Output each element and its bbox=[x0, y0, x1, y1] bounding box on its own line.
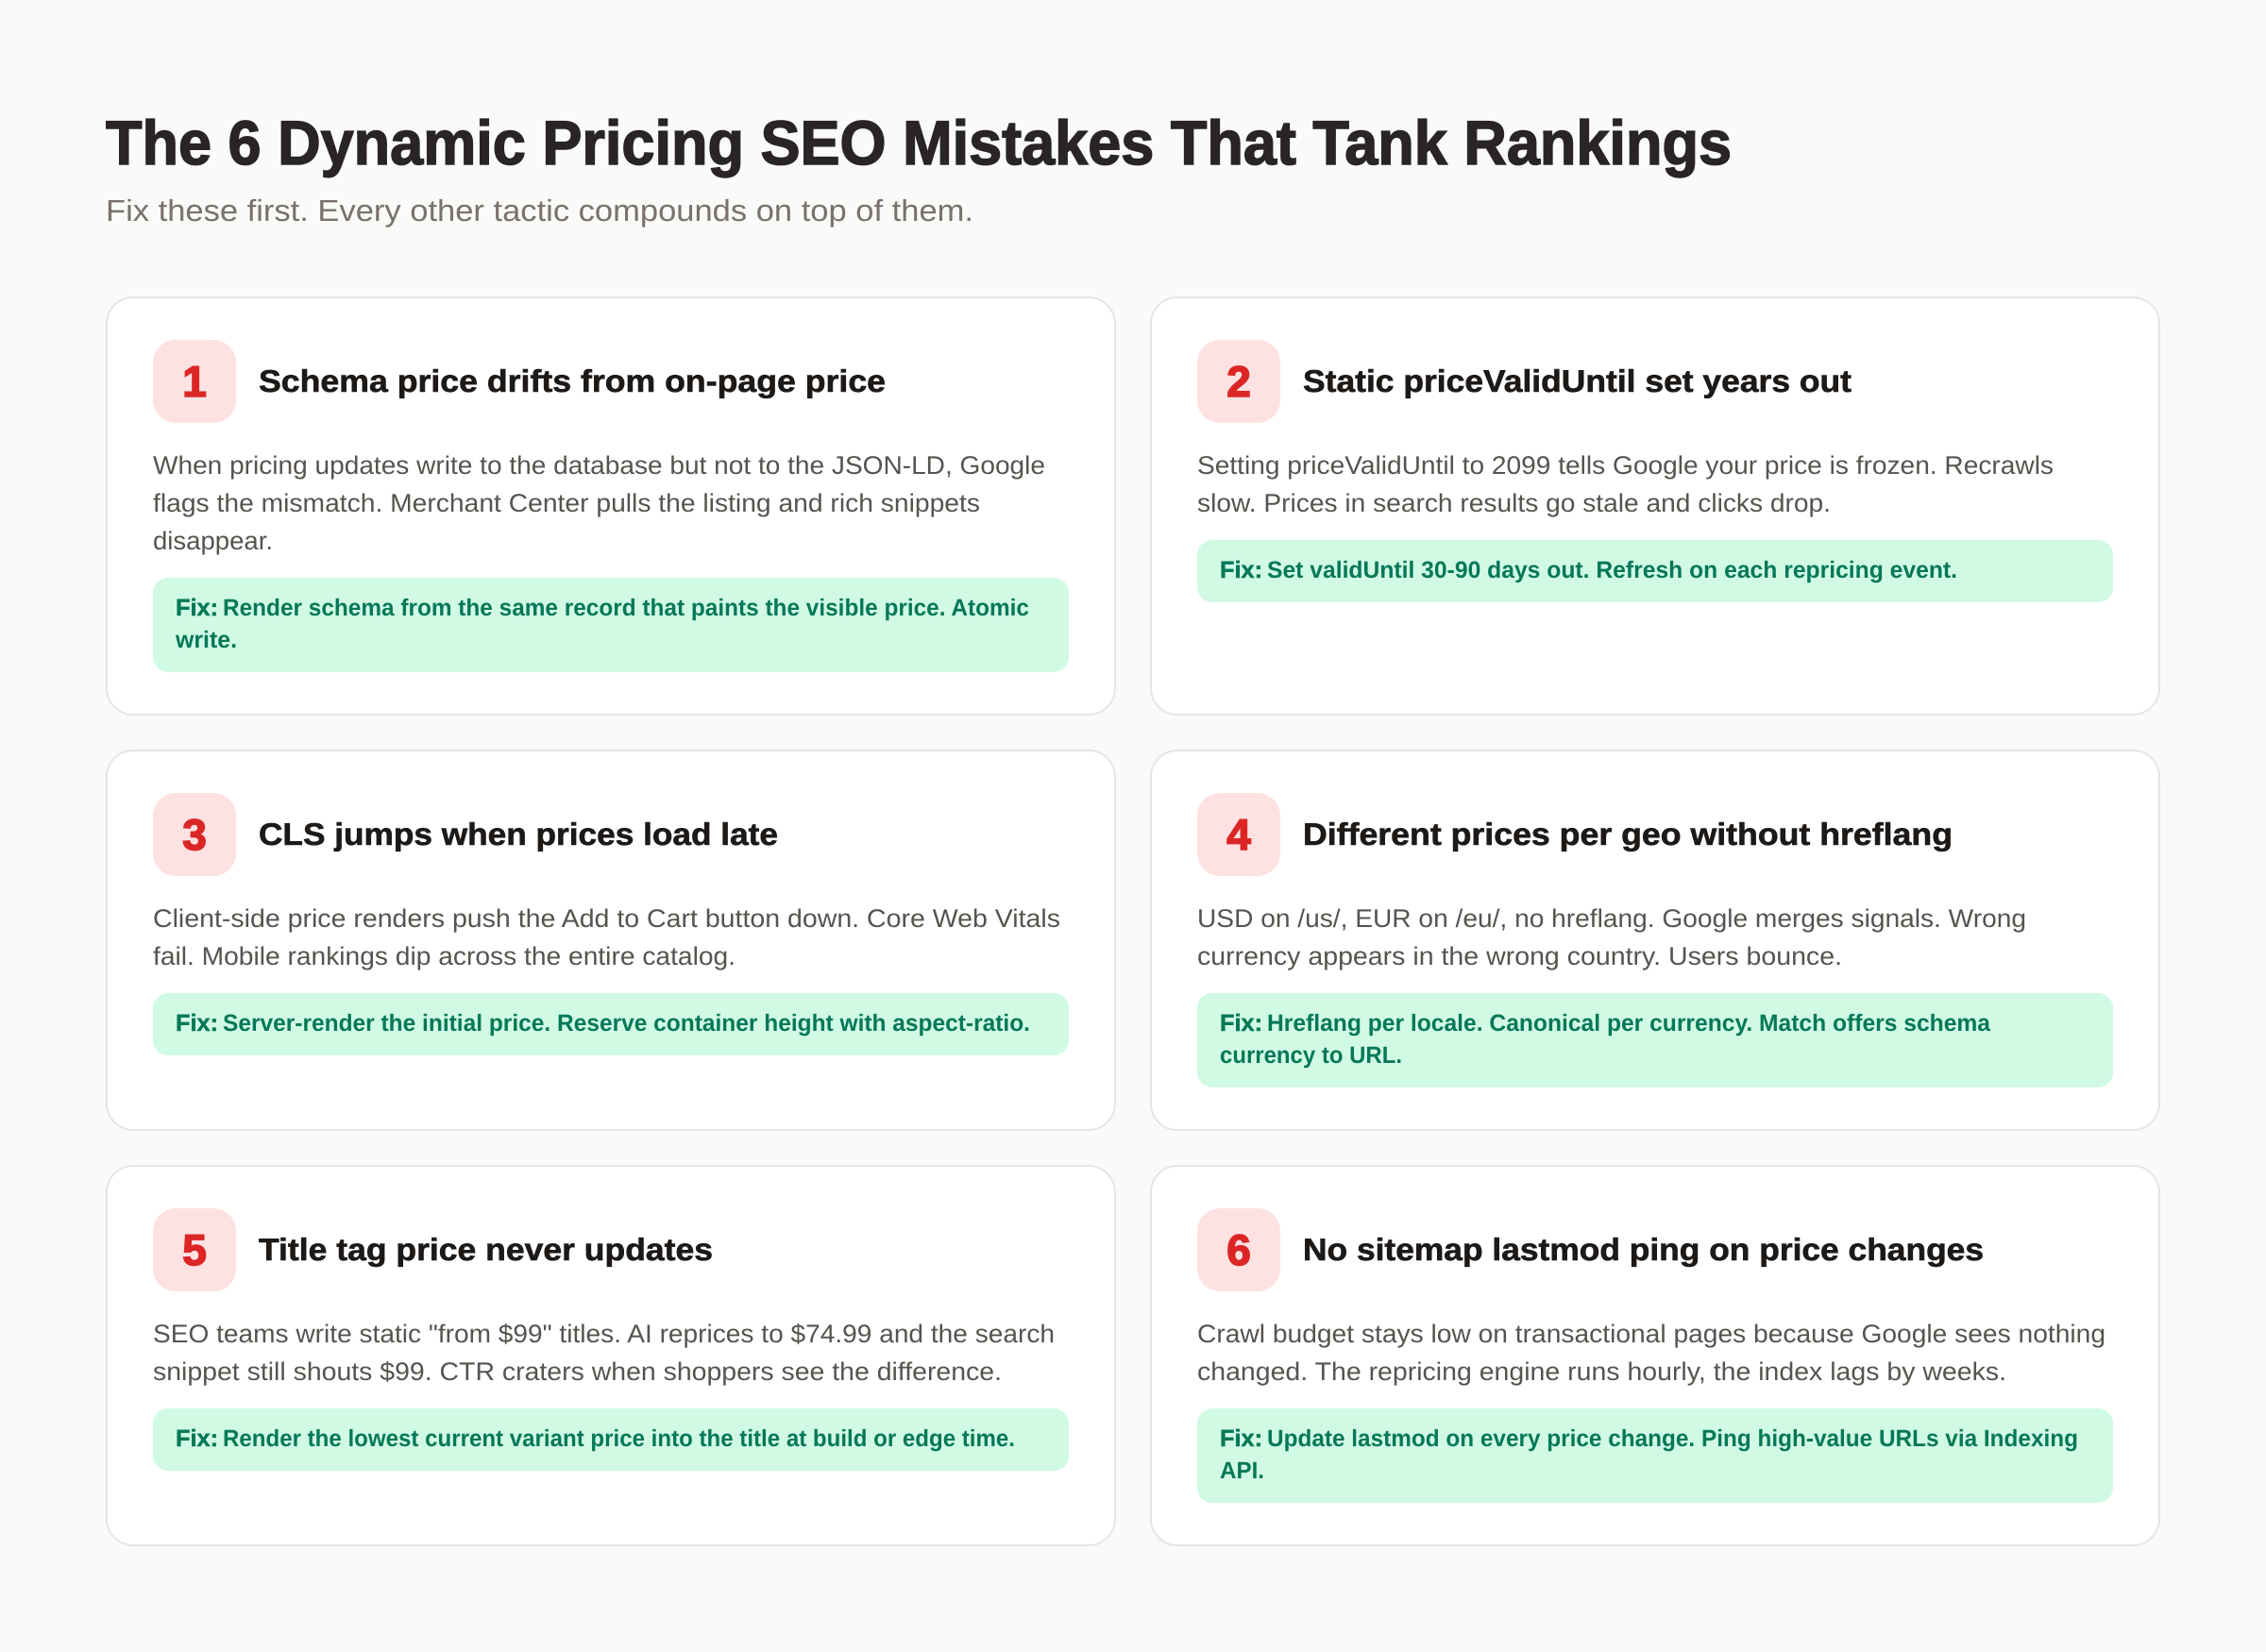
heading: mistake 6: No sitemap lastmod ping on price changes bbox=[1303, 1232, 1984, 1267]
text: mistake 1 description: When pricing updates write to the database but not to the JSON-LD, Google bbox=[153, 451, 1045, 480]
text: mistake 1 description bbox=[153, 451, 1045, 555]
panel: mistake 6 bbox=[1151, 1166, 2159, 1545]
icon: number badge 4 bbox=[1197, 793, 1280, 876]
callout: fix 6: Update lastmod on every price change. Ping high-value URLs via Indexing bbox=[1267, 1425, 2078, 1452]
callout: fix 5 bbox=[153, 1408, 1069, 1471]
icon: number badge 3: 3 bbox=[182, 810, 207, 859]
icon: number badge 2: 2 bbox=[1226, 357, 1251, 406]
heading: mistake 2: Static priceValidUntil set years out bbox=[1303, 363, 1852, 398]
heading: mistake 1: Schema price drifts from on-page price bbox=[259, 363, 886, 398]
text: mistake 2 description bbox=[1197, 451, 2054, 517]
callout: fix 4: currency to URL. bbox=[1220, 1042, 1402, 1069]
text: mistake 3 description: Client-side price renders push the Add to Cart button down. Core Web Vitals bbox=[153, 904, 1060, 933]
callout: fix 1 bbox=[153, 578, 1069, 672]
callout: fix 3: Server-render the initial price. Reserve container height with aspect-ratio. bbox=[223, 1010, 1030, 1037]
panel: mistake 2 bbox=[1151, 297, 2159, 715]
text: mistake 5 description bbox=[153, 1320, 1055, 1386]
panel: mistake 3 bbox=[107, 750, 1115, 1130]
callout: fix 4: Fix: bbox=[1220, 1010, 1262, 1037]
text: mistake 5 description: snippet still shouts $99. CTR craters when shoppers see the difference. bbox=[153, 1357, 1002, 1386]
text: mistake 1 description: disappear. bbox=[153, 527, 273, 555]
callout: fix 1: Fix: bbox=[176, 595, 218, 621]
text: mistake 6 description: changed. The repricing engine runs hourly, the index lags by weeks. bbox=[1197, 1357, 2006, 1386]
text: mistake 2 description: Setting priceValidUntil to 2099 tells Google your price is frozen. Recrawls bbox=[1197, 451, 2054, 480]
panel: mistake 4 bbox=[1151, 750, 2159, 1130]
icon: number badge 5 bbox=[153, 1208, 236, 1291]
icon: number badge 1: 1 bbox=[182, 357, 207, 406]
title: The 6 Dynamic Pricing SEO Mistakes That Tank Rankings bbox=[106, 108, 1732, 177]
callout: fix 4: Hreflang per locale. Canonical per currency. Match offers schema bbox=[1267, 1010, 1991, 1037]
icon: number badge 1 bbox=[153, 340, 236, 423]
callout: fix 4 bbox=[1197, 993, 2113, 1087]
panel: mistake 1 bbox=[107, 297, 1115, 715]
text: mistake 4 description bbox=[1197, 904, 2026, 970]
heading: mistake 3: CLS jumps when prices load late bbox=[259, 817, 778, 851]
text: mistake 6 description bbox=[1197, 1320, 2105, 1386]
text: mistake 4 description: USD on /us/, EUR on /eu/, no hreflang. Google merges signals. Wrong bbox=[1197, 904, 2026, 933]
callout: fix 3 bbox=[153, 993, 1069, 1055]
text: mistake 2 description: slow. Prices in search results go stale and clicks drop. bbox=[1197, 489, 1831, 517]
text: mistake 3 description: fail. Mobile rankings dip across the entire catalog. bbox=[153, 942, 736, 970]
text: mistake 6 description: Crawl budget stays low on transactional pages because Google sees nothing bbox=[1197, 1320, 2105, 1348]
panel: mistake 5 bbox=[107, 1166, 1115, 1545]
heading: mistake 5: Title tag price never updates bbox=[259, 1232, 713, 1267]
callout: fix 6 bbox=[1197, 1408, 2113, 1503]
callout: fix 5: Fix: bbox=[176, 1425, 218, 1452]
callout: fix 1: write. bbox=[175, 627, 237, 653]
callout: fix 3: Fix: bbox=[176, 1010, 218, 1037]
callout: fix 1: Render schema from the same record that paints the visible price. Atomic bbox=[223, 595, 1029, 621]
text: mistake 4 description: currency appears in the wrong country. Users bounce. bbox=[1197, 942, 1842, 970]
callout: fix 6: Fix: bbox=[1220, 1425, 1262, 1452]
icon: number badge 2 bbox=[1197, 340, 1280, 423]
text: mistake 3 description bbox=[153, 904, 1060, 970]
callout: fix 6: API. bbox=[1220, 1458, 1264, 1484]
callout: fix 2: Set validUntil 30-90 days out. Refresh on each repricing event. bbox=[1267, 557, 1957, 583]
icon: number badge 3 bbox=[153, 793, 236, 876]
icon: number badge 6: 6 bbox=[1226, 1225, 1251, 1274]
heading: mistake 4: Different prices per geo without hreflang bbox=[1303, 817, 1953, 851]
icon: number badge 4: 4 bbox=[1226, 810, 1251, 859]
callout: fix 2 bbox=[1197, 540, 2113, 602]
callout: fix 5: Render the lowest current variant price into the title at build or edge time. bbox=[223, 1425, 1015, 1452]
icon: number badge 6 bbox=[1197, 1208, 1280, 1291]
text: mistake 1 description: flags the mismatch. Merchant Center pulls the listing and rich snippets bbox=[153, 489, 980, 517]
subtitle: Fix these first. Every other tactic compounds on top of them. bbox=[106, 194, 973, 228]
text: mistake 5 description: SEO teams write static "from $99" titles. AI reprices to $74.99 and the search bbox=[153, 1320, 1055, 1348]
callout: fix 2: Fix: bbox=[1220, 557, 1262, 583]
icon: number badge 5: 5 bbox=[182, 1225, 207, 1274]
